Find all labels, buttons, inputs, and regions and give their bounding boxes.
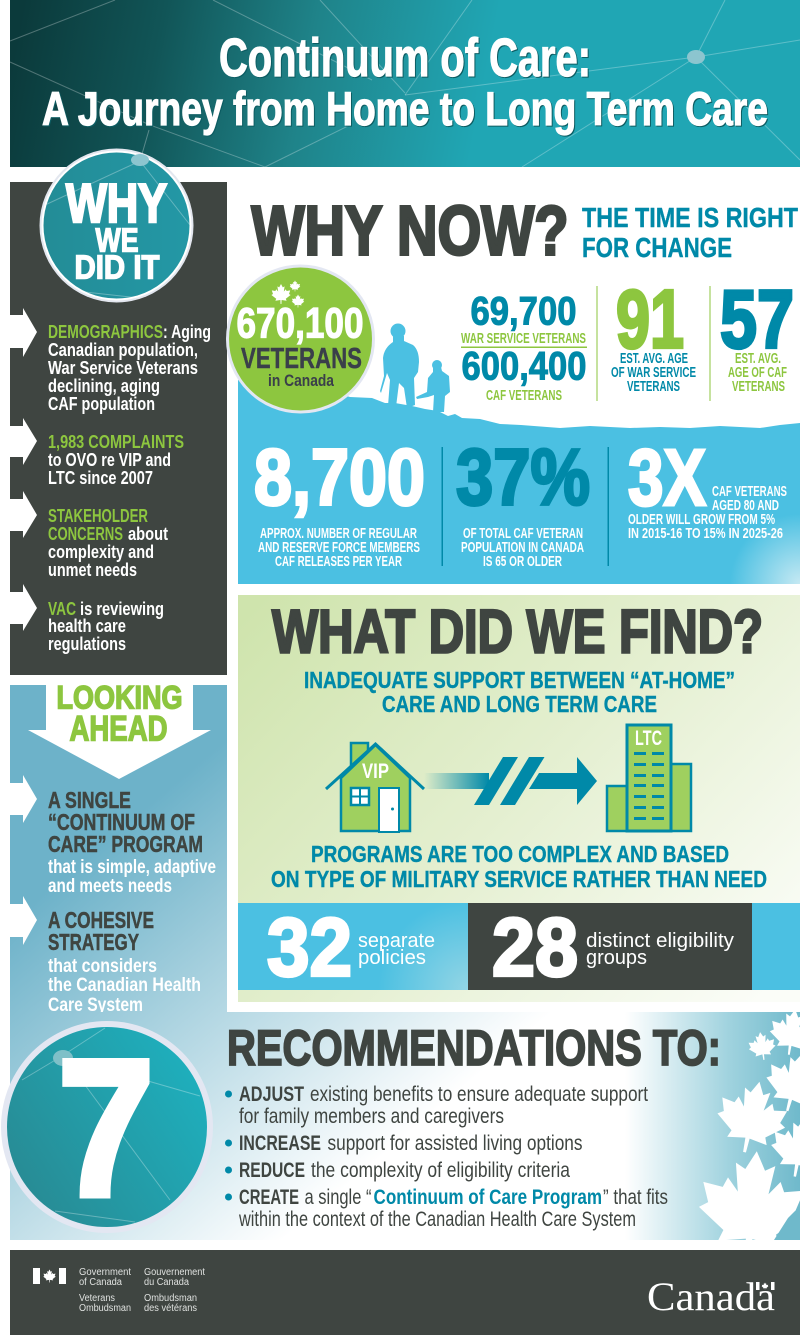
text block: cohesive strategy: A COHESIVE	[48, 907, 154, 933]
stat: 28 distinct eligibility groups: 28	[492, 900, 578, 994]
recommendation: create: ” that fits	[603, 1186, 668, 1209]
text block: cohesive strategy: STRATEGY	[48, 929, 139, 955]
text block: government of Canada signature: of Canada	[79, 1277, 122, 1288]
arrow	[10, 418, 37, 465]
stat: veteran counts: WAR SERVICE VETERANS	[461, 331, 586, 347]
stat: 3X	[628, 433, 787, 542]
arrow	[10, 896, 37, 945]
text block: single program: “CONTINUUM OF	[48, 809, 195, 835]
text block: complaints	[48, 432, 184, 488]
stat: 8,700: AND RESERVE FORCE MEMBERS	[258, 540, 420, 556]
recommendation: create: Continuum of Care Program	[374, 1186, 602, 1209]
header banner	[10, 0, 800, 167]
stat: 32 separate policies: policies	[358, 947, 426, 969]
stat: 91: EST. AVG. AGE	[620, 351, 688, 367]
text block: government of Canada signature: Ombudsman	[144, 1293, 197, 1304]
recommendation: reduce	[225, 1159, 570, 1182]
text block: government of Canada signature: Gouvernement	[144, 1267, 205, 1278]
text block: demographics	[48, 322, 211, 414]
callout: 670,100 veterans: VETERANS	[241, 343, 362, 375]
stat: 91: VETERANS	[627, 379, 680, 395]
stat: 32 separate policies: separate	[358, 930, 435, 952]
down arrow with heading: LOOKING	[56, 680, 182, 716]
stat: 37%: POPULATION IN CANADA	[461, 540, 584, 556]
icon: broken arrow	[424, 757, 597, 805]
arrow	[10, 775, 37, 823]
stat: 37%	[456, 432, 590, 570]
stat: veteran counts: 69,700	[470, 290, 576, 334]
panel: recommendations	[1, 1012, 800, 1240]
icon: LTC building	[607, 725, 691, 831]
callout: 670,100 veterans	[226, 264, 375, 414]
stat: veteran counts: 600,400	[462, 344, 586, 388]
recommendation: adjust: ADJUST	[239, 1083, 304, 1106]
heading: why now: WHY NOW?	[252, 192, 568, 270]
text block: government of Canada signature: Ombudsman	[79, 1303, 131, 1314]
text block: government of Canada signature	[79, 1267, 205, 1314]
recommendation: create	[225, 1186, 668, 1231]
text block: demographics: declining, aging	[48, 376, 160, 396]
circle badge: 7	[1, 1020, 213, 1237]
recommendation: create: CREATE	[239, 1186, 299, 1209]
subheading: inadequate support: CARE AND LONG TERM CARE	[382, 691, 657, 717]
stat: 28 distinct eligibility groups	[492, 900, 734, 994]
text block: demographics: : Aging	[163, 322, 211, 342]
stat: 28 distinct eligibility groups: groups	[586, 947, 647, 969]
text block: government of Canada signature: des vétérans	[144, 1303, 197, 1314]
text block: single program: CARE” PROGRAM	[48, 831, 203, 857]
stat: veteran counts: CAF VETERANS	[486, 388, 562, 404]
stat: 8,700: APPROX. NUMBER OF REGULAR	[260, 526, 417, 542]
text block: complaints: LTC since 2007	[48, 468, 153, 488]
circle badge: why we did it: WHY	[66, 172, 167, 234]
callout: 670,100 veterans: in Canada	[268, 371, 334, 390]
icon: house VIP	[326, 743, 424, 832]
subheading: the time is right for change: FOR CHANGE	[582, 232, 732, 263]
logo: Canada wordmark: Canada	[647, 1274, 775, 1319]
text block: demographics: CAF population	[48, 394, 155, 414]
stat: 91: OF WAR SERVICE	[611, 365, 696, 381]
text block: demographics: War Service Veterans	[48, 358, 198, 378]
text block: stakeholder concerns: about	[128, 524, 168, 544]
text block: single program	[48, 787, 216, 897]
stat: 91: 91	[616, 272, 684, 366]
stat: 8,700: CAF RELEASES PER YEAR	[275, 554, 402, 570]
stat: 8,700: 8,700	[254, 432, 425, 522]
text block: government of Canada signature: Government	[79, 1267, 131, 1278]
circle badge: why we did it: WE	[96, 222, 138, 258]
icon: LTC building: LTC	[635, 727, 662, 750]
callout: 670,100 veterans: 670,100	[236, 300, 364, 348]
stat: 91	[611, 272, 696, 395]
text block: stakeholder concerns: STAKEHOLDER	[48, 506, 148, 526]
stat: 32 separate policies: 32	[267, 900, 352, 994]
text block: single program: A SINGLE	[48, 787, 131, 813]
stat: veteran counts	[461, 290, 587, 404]
panel: why now blue hillside	[238, 380, 800, 584]
footer	[10, 1250, 800, 1335]
recommendation: reduce: the complexity of eligibility criteria	[311, 1159, 570, 1182]
stat: 8,700	[254, 432, 425, 570]
icon: Canadian flag	[33, 1268, 66, 1284]
arrow	[10, 584, 37, 631]
recommendation: increase	[225, 1132, 582, 1155]
text block: single program: and meets needs	[48, 876, 172, 897]
text block: government of Canada signature: du Canada	[144, 1277, 189, 1288]
circle badge: 7: 7	[58, 1020, 154, 1237]
arrow	[10, 308, 37, 357]
stat: 28 distinct eligibility groups: distinct eligibility	[586, 930, 734, 952]
arrow	[10, 491, 37, 538]
title	[42, 28, 768, 135]
stat: 3X: 3X	[628, 433, 706, 522]
text block: cohesive strategy: that considers	[48, 956, 157, 977]
recommendation: create: a single “	[304, 1186, 372, 1209]
recommendation: create: within the context of the Canadian Health Care System	[238, 1208, 636, 1231]
text block: complaints: to OVO re VIP and	[48, 450, 171, 470]
recommendation: adjust	[225, 1083, 648, 1128]
subheading: inadequate support	[304, 667, 735, 717]
icon: maple leaf cluster	[699, 1012, 800, 1240]
text block: VAC	[48, 599, 164, 654]
panel: why we did it	[10, 130, 227, 675]
text block: programs too complex	[271, 841, 767, 892]
down arrow with heading	[28, 680, 211, 779]
text block: single program: that is simple, adaptive	[48, 857, 216, 878]
title: Continuum of Care:	[219, 28, 591, 88]
text block: demographics: Canadian population,	[48, 340, 198, 360]
text block: cohesive strategy: Care System	[48, 995, 143, 1016]
stat: 37%: 37%	[456, 432, 590, 522]
text block: demographics: DEMOGRAPHICS	[48, 322, 163, 342]
icon: house VIP: VIP	[362, 760, 389, 783]
text block: stakeholder concerns: CONCERNS	[48, 524, 123, 544]
recommendation: adjust: for family members and caregivers	[239, 1105, 504, 1128]
stat band	[238, 900, 800, 994]
recommendation: adjust: existing benefits to ensure adequate support	[310, 1083, 648, 1106]
icon: soldier silhouettes	[380, 324, 450, 412]
text block: complaints: 1,983 COMPLAINTS	[48, 432, 184, 452]
recommendation: increase: support for assisted living options	[328, 1132, 582, 1155]
icon: maple leaves	[271, 280, 304, 308]
text block: stakeholder concerns: complexity and	[48, 542, 154, 562]
recommendation: increase: INCREASE	[239, 1132, 321, 1155]
text block: stakeholder concerns	[48, 506, 168, 580]
text block: VAC: is reviewing	[80, 599, 164, 619]
subheading: the time is right for change	[582, 202, 798, 263]
stat: 32 separate policies	[267, 900, 435, 994]
text block: stakeholder concerns: unmet needs	[48, 560, 137, 580]
panel: what did we find	[238, 595, 800, 1002]
circle badge: why we did it: DID IT	[74, 248, 160, 286]
panel: looking ahead	[10, 680, 227, 1016]
circle badge: why we did it	[40, 130, 194, 302]
stat: 37%: IS 65 OR OLDER	[483, 554, 562, 570]
text block: cohesive strategy	[48, 907, 201, 1016]
text block: government of Canada signature: Veterans	[79, 1293, 115, 1304]
recommendation: reduce: REDUCE	[239, 1159, 305, 1182]
text block: VAC: regulations	[48, 634, 126, 654]
down arrow with heading: AHEAD	[70, 710, 168, 748]
stat: 37%: OF TOTAL CAF VETERAN	[463, 526, 583, 542]
text block: VAC: VAC	[48, 599, 76, 619]
text block: VAC: health care	[48, 616, 126, 636]
text block: cohesive strategy: the Canadian Health	[48, 975, 201, 996]
